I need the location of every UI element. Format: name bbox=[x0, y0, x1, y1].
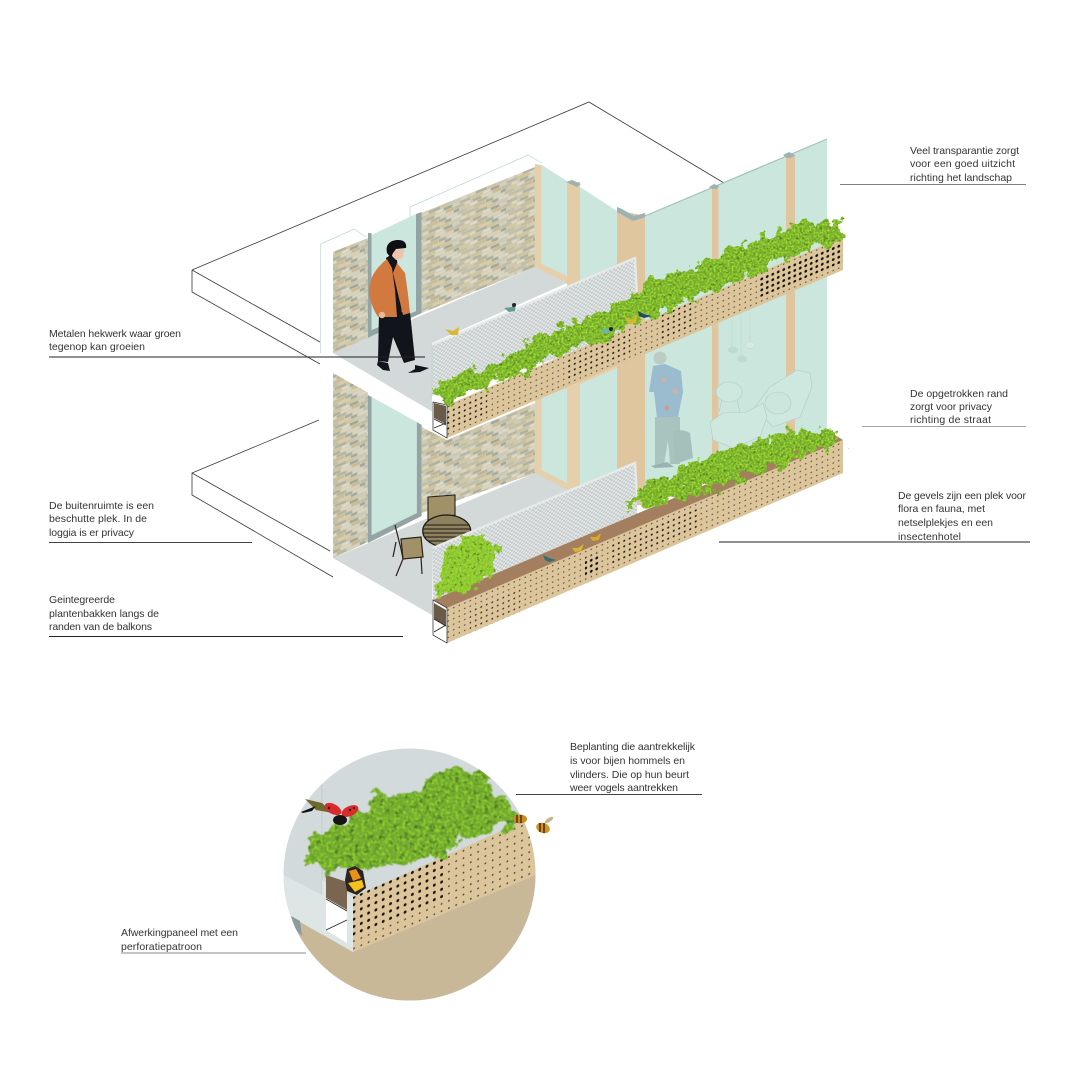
annotation: planters bbox=[49, 594, 403, 636]
lower storey facade bbox=[333, 366, 617, 615]
icon: ladybug bbox=[301, 799, 360, 825]
annotation: raised edge: zorgt voor privacy bbox=[910, 401, 993, 413]
annotation: outdoor space: De buitenruimte is een bbox=[49, 500, 154, 512]
birds on upper floor bbox=[445, 303, 516, 335]
annotation: fence: Metalen hekwerk waar groen bbox=[49, 328, 181, 340]
lower window bbox=[368, 395, 422, 543]
annotation: finishing panel: perforatiepatroon bbox=[121, 941, 202, 953]
perforated panel bbox=[447, 237, 843, 438]
annotation: outdoor space: beschutte plek. In de bbox=[49, 513, 147, 525]
upper storey facade bbox=[321, 155, 617, 412]
perforated panel bbox=[353, 815, 540, 952]
annotation: outdoor space: loggia is er privacy bbox=[49, 527, 135, 539]
shoes bbox=[377, 361, 429, 373]
upper foliage strip bbox=[430, 220, 842, 402]
annotation: flora and fauna: flora en fauna, met bbox=[898, 503, 985, 515]
timber column bbox=[617, 207, 646, 505]
building outline lines bbox=[192, 102, 724, 577]
annotation: transparency: Veel transparantie zorgt bbox=[910, 145, 1019, 157]
annotation: transparency bbox=[840, 145, 1026, 184]
annotation: planting: Beplanting die aantrekkelijk bbox=[570, 741, 696, 753]
annotation: flora and fauna: insectenhotel bbox=[898, 531, 961, 543]
upper brick wall left bbox=[333, 238, 368, 353]
annotation: planters: randen van de balkons bbox=[49, 621, 152, 633]
frame of section bbox=[322, 875, 353, 952]
planter end section bbox=[433, 402, 447, 438]
icon: bee one bbox=[513, 814, 527, 824]
birds on planter bbox=[543, 533, 601, 562]
annotation: planters: plantenbakken langs de bbox=[49, 608, 159, 620]
lower planter bbox=[433, 430, 843, 643]
upper planter bbox=[430, 220, 843, 438]
annotation: planters: Geintegreerde bbox=[49, 594, 115, 606]
annotation: flora and fauna: netselplekjes en een bbox=[898, 517, 993, 529]
detail circle bbox=[280, 745, 540, 1005]
front chair bbox=[393, 525, 423, 576]
lower fence bbox=[433, 463, 637, 605]
interior person faded bbox=[649, 352, 693, 468]
lower balcony floor bbox=[333, 473, 568, 615]
annotation: finishing panel bbox=[121, 927, 306, 953]
bush bbox=[438, 538, 498, 598]
annotation: flora and fauna: De gevels zijn een plek voor bbox=[898, 490, 1026, 502]
upper timber and glass bbox=[535, 164, 617, 300]
trousers bbox=[378, 312, 415, 363]
upper slab white edge bbox=[320, 353, 433, 429]
upper brick wall right bbox=[422, 167, 535, 313]
annotation: finishing panel: Afwerkingpaneel met een bbox=[121, 927, 238, 939]
upper fence bbox=[432, 258, 637, 396]
lower brick wall left bbox=[333, 372, 368, 558]
upper person bbox=[369, 240, 429, 373]
dark wall edge bbox=[291, 916, 302, 936]
lower timber frame and glass bbox=[535, 366, 617, 510]
annotation: raised edge: De opgetrokken rand bbox=[910, 388, 1008, 400]
interior furniture outlines bbox=[710, 370, 812, 448]
lower brick wall right bbox=[422, 403, 535, 513]
mullion caps bbox=[709, 152, 795, 189]
planter end section bbox=[433, 600, 447, 643]
annotation: fence: tegenop kan groeien bbox=[49, 341, 145, 353]
icon: butterfly bbox=[345, 866, 366, 895]
perforated panel bbox=[447, 440, 843, 643]
table bbox=[423, 515, 471, 547]
annotation: outdoor space bbox=[49, 500, 252, 542]
timber mullions bbox=[712, 155, 795, 462]
planter top bbox=[433, 432, 843, 608]
annotation: planting bbox=[516, 741, 702, 794]
annotation: planting: vlinders. Die op hun beurt bbox=[570, 769, 689, 781]
lower foliage strip bbox=[622, 430, 840, 510]
upper window bbox=[368, 212, 422, 338]
back chair bbox=[428, 495, 455, 530]
turtleneck bbox=[386, 254, 402, 317]
annotation: fence bbox=[49, 328, 425, 357]
annotation: raised edge bbox=[862, 388, 1026, 426]
annotation: planting: weer vogels aantrekken bbox=[569, 782, 678, 794]
annotation: planting: is voor bijen hommels en bbox=[570, 755, 685, 767]
jacket bbox=[369, 259, 410, 317]
hand bbox=[379, 312, 385, 318]
pendant lamps bbox=[728, 312, 755, 362]
pier and lintel bbox=[321, 155, 542, 354]
annotation: flora and fauna bbox=[719, 490, 1030, 543]
annotation: raised edge: richting de straat bbox=[910, 414, 991, 426]
circle background wall bbox=[280, 745, 540, 1005]
icon: bee two bbox=[535, 815, 554, 835]
annotation: transparency: richting het landschap bbox=[910, 172, 1012, 184]
circle foliage bbox=[308, 768, 527, 875]
birds in foliage bbox=[601, 311, 652, 333]
left wall panel bbox=[280, 785, 322, 935]
upper balcony floor bbox=[333, 267, 567, 412]
right glass facade bbox=[645, 139, 827, 505]
annotation: transparency: voor een goed uitzicht bbox=[910, 158, 1015, 170]
face bbox=[392, 249, 404, 260]
tan ground bbox=[292, 875, 536, 1000]
hair bbox=[387, 240, 406, 258]
lower table and chairs bbox=[393, 495, 471, 576]
